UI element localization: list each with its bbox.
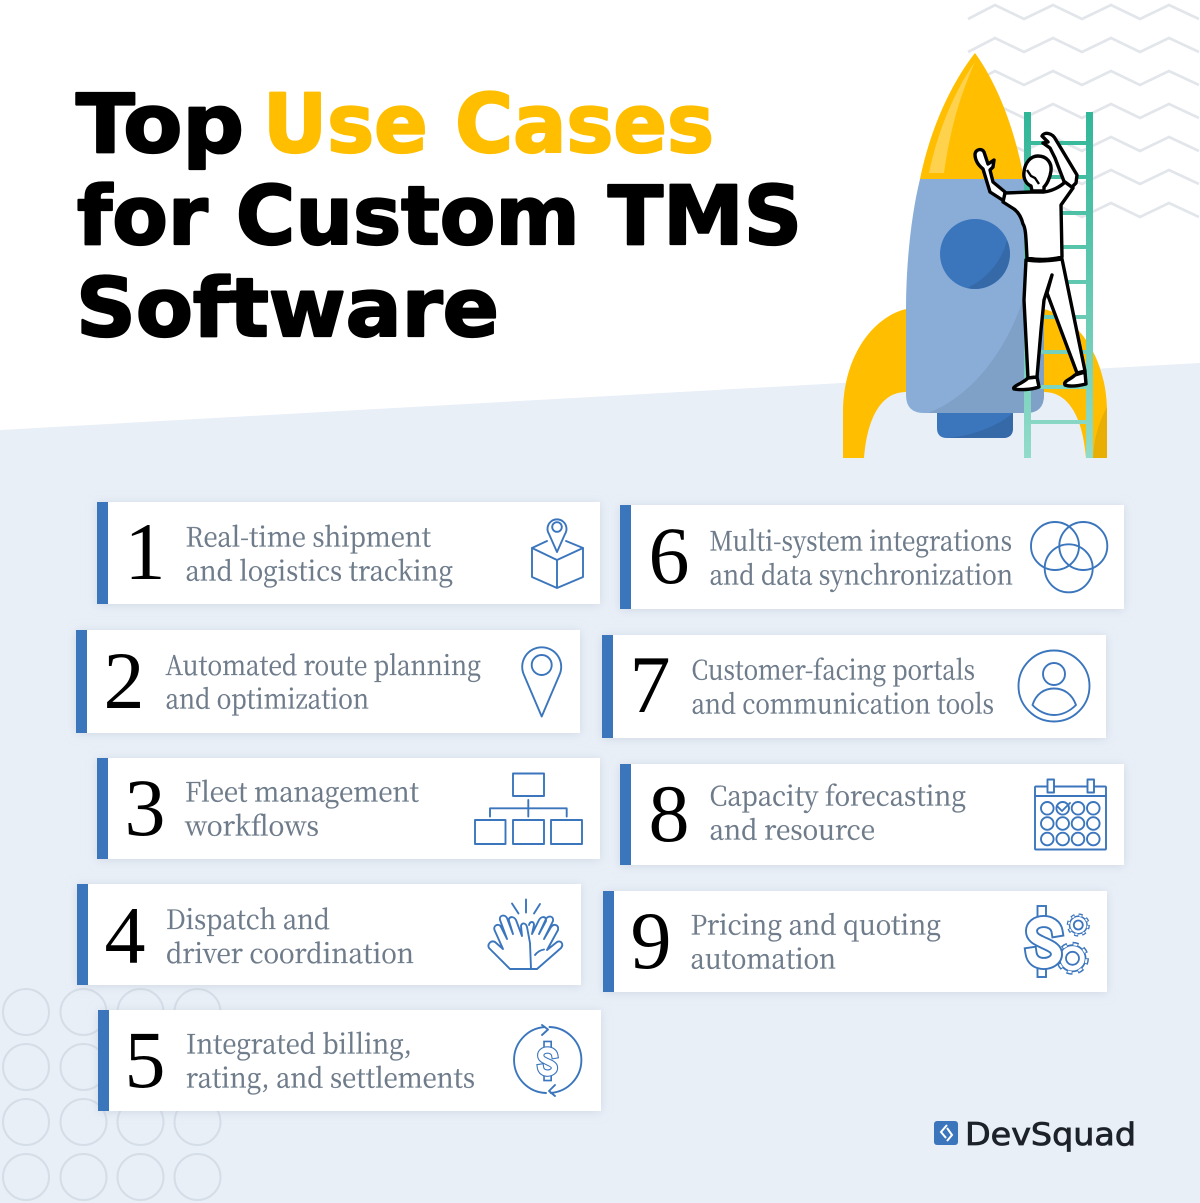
body shade xyxy=(928,290,1044,413)
card 3: workflows xyxy=(184,804,319,844)
person trousers xyxy=(1024,259,1085,378)
title xyxy=(76,78,802,356)
icon: org chart xyxy=(475,774,582,844)
card 8 xyxy=(620,764,1124,865)
logo wordmark: DevSquad xyxy=(965,1117,1136,1153)
title: Use Cases xyxy=(263,78,714,172)
person head xyxy=(1024,156,1051,191)
person arm right xyxy=(1042,133,1077,188)
card 9: Pricing and quoting xyxy=(690,904,941,942)
dollar symbol xyxy=(1031,906,1057,977)
card 2: Automated route planning xyxy=(166,644,481,683)
nose highlight xyxy=(929,62,975,173)
person shirt xyxy=(1003,182,1073,259)
chevron pattern xyxy=(968,5,1199,217)
card 9: automation xyxy=(690,938,836,976)
icon: user xyxy=(1018,650,1090,722)
card 6: 6 xyxy=(648,510,690,601)
icon: high five xyxy=(488,900,562,969)
icon: map pin xyxy=(522,647,561,716)
card 5: rating, and settlements xyxy=(186,1056,475,1096)
illustration: rocket with person on ladder xyxy=(843,53,1107,458)
rocket nose xyxy=(920,53,1024,179)
card 3: Fleet management xyxy=(185,770,419,810)
title: Software xyxy=(76,262,499,356)
rocket window xyxy=(940,219,1010,289)
small gear xyxy=(1068,915,1089,935)
card 5 xyxy=(98,1010,601,1111)
icon: calendar xyxy=(1035,780,1106,850)
card 6: and data synchronization xyxy=(710,554,1013,592)
card 8: and resource xyxy=(710,808,875,848)
card 1: 1 xyxy=(124,506,166,597)
card 3: 3 xyxy=(124,762,166,853)
icon: dollar cycle xyxy=(514,1025,581,1096)
title: Top xyxy=(76,78,244,172)
card 9 xyxy=(603,891,1107,992)
card 4: Dispatch and xyxy=(166,898,330,937)
card 5: Integrated billing, xyxy=(186,1022,412,1062)
person arm left xyxy=(975,150,1005,201)
icon: dollar and gears xyxy=(1031,906,1089,977)
card 8: 8 xyxy=(648,768,690,859)
card 4: driver coordination xyxy=(166,932,414,971)
person shoes xyxy=(1014,372,1086,390)
card 3 xyxy=(97,758,600,859)
card 5: 5 xyxy=(124,1014,166,1105)
rocket nozzle xyxy=(937,410,1013,438)
icon: parcel with pin xyxy=(532,519,583,588)
card 2 xyxy=(76,630,580,733)
card 7: Customer-facing portals xyxy=(692,648,975,688)
card 4: 4 xyxy=(104,890,146,981)
card 1: and logistics tracking xyxy=(186,550,453,588)
rocket fins xyxy=(843,309,1107,458)
card 6 xyxy=(620,505,1124,609)
decorative circles xyxy=(3,989,220,1200)
card 7: and communication tools xyxy=(692,682,994,722)
card 7: 7 xyxy=(630,639,670,730)
title: for Custom TMS xyxy=(77,170,802,264)
ladder xyxy=(1024,112,1093,458)
card 1 xyxy=(97,502,600,604)
logo: DevSquad xyxy=(934,1117,1136,1153)
icon: venn circles xyxy=(1031,522,1107,592)
person xyxy=(975,133,1086,390)
card 8: Capacity forecasting xyxy=(710,774,966,814)
card 2: and optimization xyxy=(166,678,369,716)
logo mark xyxy=(934,1121,958,1145)
dollar symbol xyxy=(540,1041,555,1081)
rocket body xyxy=(906,179,1044,413)
large gear xyxy=(1058,944,1087,973)
card 4 xyxy=(77,884,581,985)
card 7 xyxy=(602,635,1106,738)
card 9: 9 xyxy=(630,895,672,986)
card 2: 2 xyxy=(104,635,144,726)
card 1: Real-time shipment xyxy=(186,516,431,554)
card 6: Multi-system integrations xyxy=(710,520,1012,558)
person hair detail xyxy=(1027,170,1039,184)
